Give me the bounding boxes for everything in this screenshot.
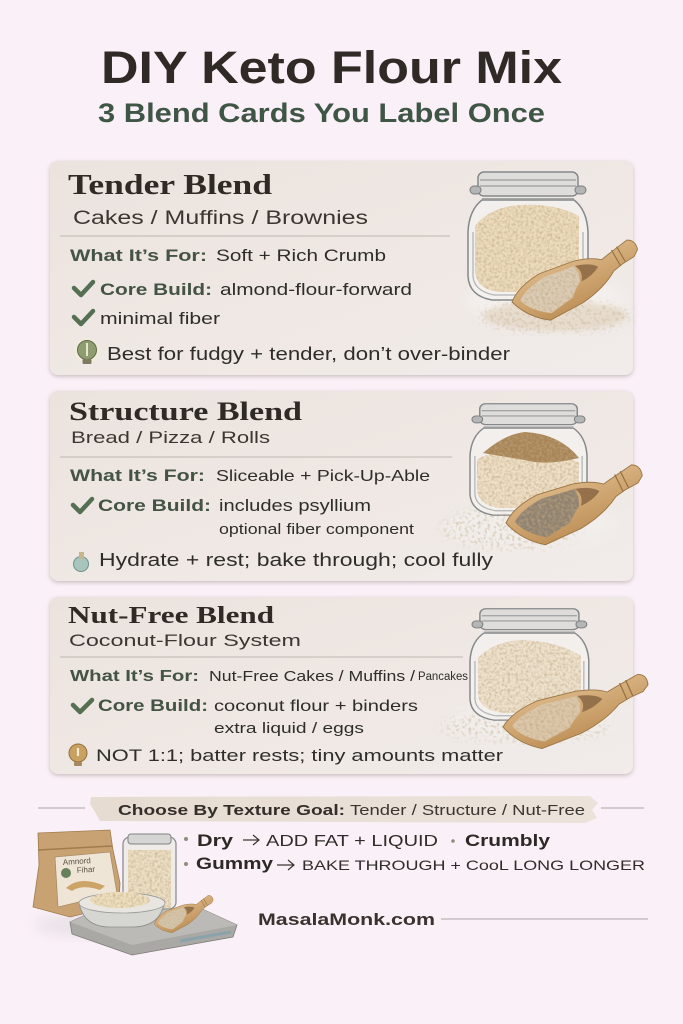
text: extra liquid: extra liquid / eggs xyxy=(214,720,364,737)
icon: small jar xyxy=(123,834,176,909)
text: sliceable: Sliceable + Pick-Up-Able xyxy=(216,468,430,485)
text: soft and rich crumb: Soft + Rich Crumb xyxy=(216,246,386,265)
icon: small scoop xyxy=(151,892,219,938)
icon: bowl xyxy=(79,892,165,927)
text: core build: Core Build: xyxy=(98,696,208,715)
panel: structure blend xyxy=(50,391,653,581)
text: optional fiber: optional fiber component xyxy=(219,521,415,538)
text: banner label: Choose By Texture Goal: xyxy=(118,802,345,819)
text: banner options: Tender / Structure / Nut-Free xyxy=(350,802,585,819)
text: core build: Core Build: xyxy=(98,496,211,515)
icon: scale xyxy=(70,908,237,955)
heading: structure blend: Structure Blend xyxy=(69,397,303,426)
row: dry: ADD FAT + LIQUID xyxy=(266,833,438,850)
subheading: uses: Cakes / Muffins / Brownies xyxy=(73,208,368,229)
icon: check xyxy=(74,311,93,324)
panel: tender blend xyxy=(50,161,650,375)
text: tip: Best for fudgy + tender, don’t over-binder xyxy=(107,344,510,364)
icon: check xyxy=(74,282,93,295)
text: what it's for: What It’s For: xyxy=(70,466,205,485)
icon: check xyxy=(73,700,92,712)
text: what it's for: What It’s For: xyxy=(70,668,199,685)
subheading: uses: Bread / Pizza / Rolls xyxy=(71,428,270,447)
icon: paper bag: Amnord xyxy=(63,856,91,867)
heading: tender blend: Tender Blend xyxy=(68,169,272,201)
text: what it's for: What It’s For: xyxy=(70,246,207,265)
footer rule right xyxy=(601,807,644,809)
icon: flask xyxy=(74,552,88,572)
text: minimal fiber: minimal fiber xyxy=(100,309,220,328)
text: nut-free uses: Nut-Free Cakes / Muffins / xyxy=(209,669,416,685)
icon: light bulb xyxy=(74,338,100,364)
heading: nut-free blend: Nut-Free Blend xyxy=(68,603,275,629)
text: tip: Hydrate + rest; bake through; cool fully xyxy=(99,550,493,570)
text: warning: NOT 1:1; batter rests; tiny amounts matter xyxy=(96,746,503,765)
text: website: MasalaMonk.com xyxy=(258,910,435,929)
icon: warning bulb xyxy=(69,744,87,766)
text: core build: Core Build: xyxy=(100,280,212,299)
icon: paper bag: Fihar xyxy=(77,865,96,875)
row: gummy: BAKE THROUGH + CooL LONG LONGER xyxy=(302,857,645,873)
text: almond flour forward: almond-flour-forward xyxy=(220,280,412,299)
illustration: jar and scoop xyxy=(440,609,657,758)
row: gummy xyxy=(184,854,645,873)
row: dry: Dry xyxy=(197,831,234,850)
illustration: jar and scoop xyxy=(440,404,653,555)
row: gummy: Gummy xyxy=(196,854,274,873)
panel: nut-free blend xyxy=(50,597,657,774)
text: pancakes: Pancakes xyxy=(418,671,468,683)
footer rule left xyxy=(38,807,85,809)
list: troubleshooting xyxy=(184,831,645,873)
row: dry: Crumbly xyxy=(465,831,551,850)
icon: check xyxy=(73,499,92,512)
subtitle: 3 Blend Cards You Label Once xyxy=(98,98,545,128)
subheading: coconut flour system: Coconut-Flour System xyxy=(69,631,301,650)
illustration: jar and scoop xyxy=(465,172,650,334)
banner: choose by texture goal xyxy=(90,796,598,823)
icon: paper bag xyxy=(33,830,120,917)
footer rule website xyxy=(441,918,648,920)
row: dry xyxy=(184,831,551,850)
illustration: bag, jar, bowl, scale and scoop xyxy=(33,830,237,955)
text: includes psyllium: includes psyllium xyxy=(219,496,371,515)
title: DIY Keto Flour Mix xyxy=(101,42,562,93)
text: coconut flour: coconut flour + binders xyxy=(214,698,418,715)
